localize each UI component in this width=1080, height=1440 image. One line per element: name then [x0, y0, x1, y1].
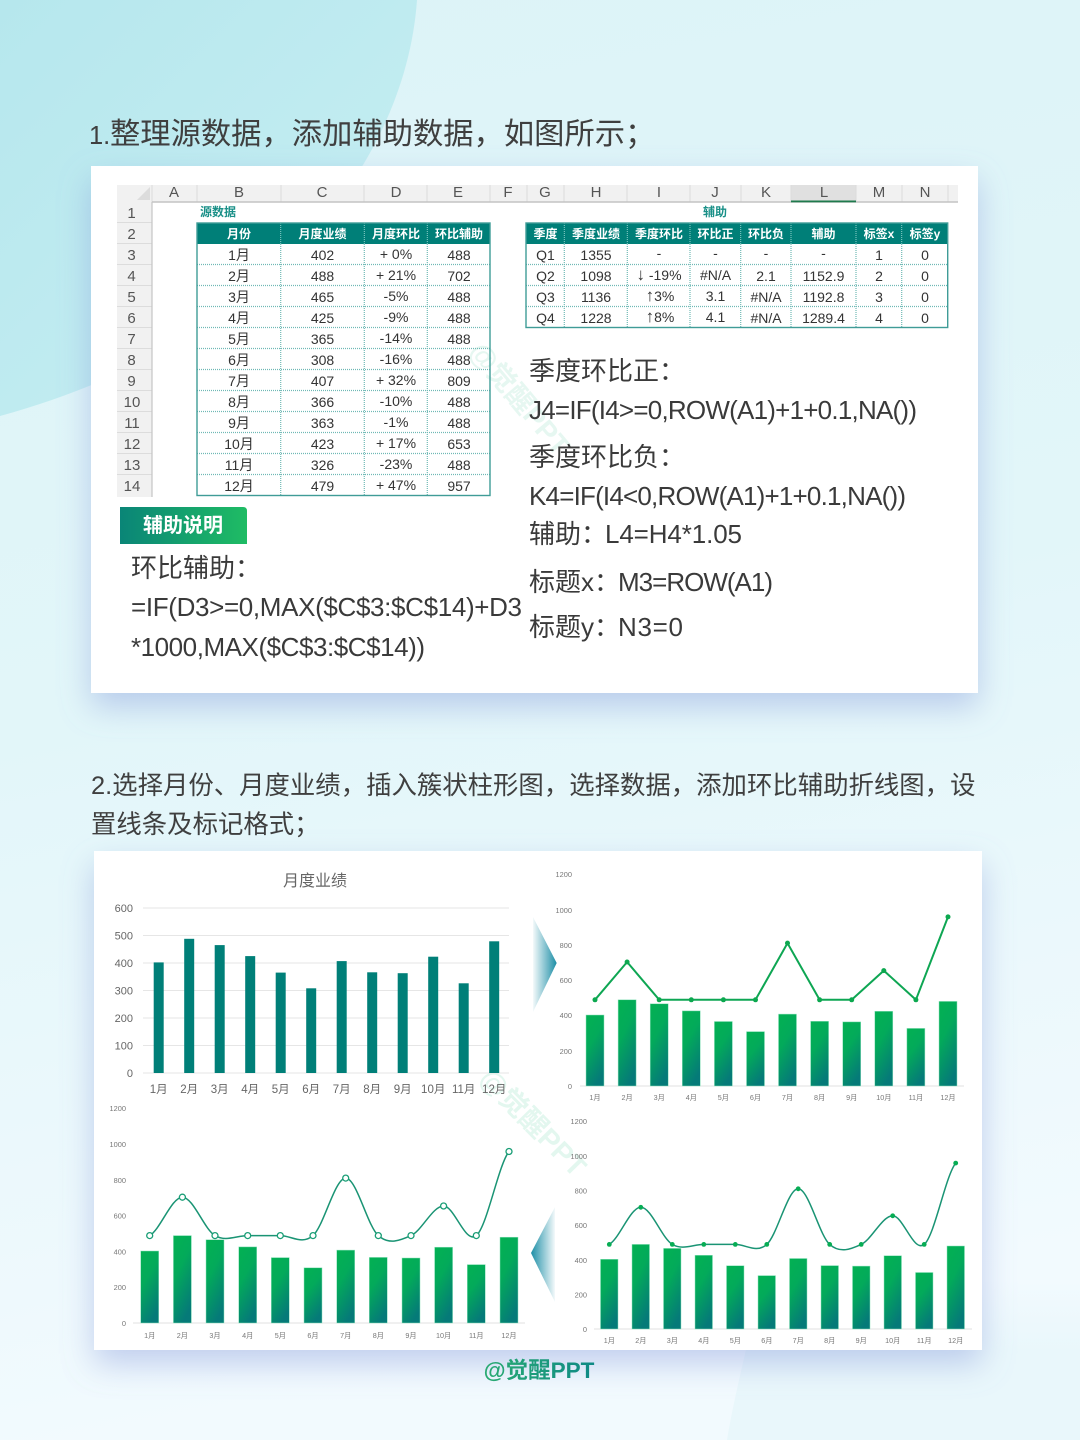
spreadsheet row headers: 10: [124, 394, 140, 411]
x axis labels: 4月: [686, 1093, 697, 1102]
label: helper data: 辅助: [703, 204, 727, 219]
table: quarterly helper data: 4: [875, 310, 883, 326]
y axis labels: 0: [127, 1068, 133, 1080]
heading: step 1: 整理源数据，添加辅助数据，如图所示；: [110, 117, 655, 151]
x axis labels: 8月: [363, 1084, 381, 1096]
x axis labels: 1月: [144, 1331, 155, 1340]
table: monthly data: + 0%: [380, 246, 412, 262]
x axis labels: 2月: [180, 1084, 198, 1096]
spreadsheet column headers: A: [169, 184, 179, 201]
x axis labels: 7月: [793, 1336, 804, 1345]
spreadsheet row headers: 2: [127, 226, 136, 243]
x axis labels: 9月: [394, 1084, 412, 1096]
text: formulas right: 标题x：: [529, 567, 620, 597]
table: monthly data: 702: [447, 268, 471, 284]
spreadsheet column headers: [117, 184, 958, 202]
spreadsheet row headers: 13: [124, 457, 140, 474]
table: quarterly helper data: 1098: [580, 268, 612, 284]
spreadsheet column headers: M: [873, 184, 885, 201]
spreadsheet row headers: 12: [124, 436, 140, 453]
text: formulas right: 季度环比正：: [529, 356, 685, 386]
x axis labels: 5月: [275, 1331, 286, 1340]
spreadsheet row headers: 5: [127, 289, 136, 306]
x axis labels: 7月: [333, 1084, 351, 1096]
x axis labels: 1月: [150, 1084, 168, 1096]
table: monthly data: 4月: [228, 310, 250, 326]
spreadsheet column headers: L: [820, 184, 828, 201]
table: quarterly helper data: 季度环比: [635, 226, 683, 241]
table: quarterly helper data: 0: [921, 310, 929, 326]
y axis labels: 400: [575, 1256, 587, 1265]
table: quarterly helper data: ↑3%: [646, 286, 674, 305]
y axis labels: 400: [560, 1011, 572, 1020]
chart title: 月度业绩: [283, 872, 347, 890]
badge: helper notes: 辅助说明: [143, 513, 223, 537]
table: quarterly helper data: #N/A: [750, 289, 782, 305]
x axis labels: 4月: [698, 1336, 709, 1345]
x axis labels: [604, 1336, 963, 1345]
y axis labels: 0: [568, 1082, 572, 1091]
table: monthly data: 10月: [224, 436, 254, 452]
x axis labels: 6月: [302, 1084, 320, 1096]
text: formulas right: 季度环比负：: [529, 442, 685, 472]
table: monthly data: 12月: [224, 478, 254, 494]
y axis labels: 600: [115, 903, 133, 915]
table: monthly data: 488: [447, 394, 471, 410]
text: formulas right: N3=0: [618, 612, 683, 642]
spreadsheet column headers: D: [391, 184, 402, 201]
table: monthly data: -23%: [380, 456, 412, 472]
bars: [586, 1000, 957, 1086]
x axis labels: 1月: [589, 1093, 601, 1102]
x axis labels: 6月: [761, 1336, 772, 1345]
table: monthly data: -10%: [380, 393, 412, 409]
table: monthly data: 2月: [228, 268, 250, 284]
smooth line with markers: [607, 1161, 958, 1250]
table: monthly data: 809: [447, 373, 471, 389]
chart 2: combo chart with straight line: [556, 870, 964, 1102]
table: monthly data: 363: [311, 415, 334, 431]
y axis labels: 800: [575, 1186, 587, 1196]
heading: step 2: [91, 772, 975, 839]
table: monthly data: 308: [311, 352, 334, 368]
bars: [154, 939, 499, 1073]
table: quarterly helper data: 0: [921, 289, 929, 305]
table: monthly data: -14%: [380, 330, 412, 346]
y axis labels: 1000: [110, 1140, 126, 1149]
x axis labels: 2月: [635, 1336, 646, 1345]
table: quarterly helper data: Q2: [536, 268, 555, 284]
table: monthly data: 653: [447, 436, 471, 452]
table: monthly data: 环比辅助: [435, 226, 483, 241]
table: monthly data: 9月: [228, 415, 250, 431]
x axis labels: 11月: [909, 1093, 923, 1102]
table: quarterly helper data: 1: [875, 247, 883, 263]
x axis labels: 3月: [209, 1331, 221, 1340]
table: quarterly helper data: 2.1: [756, 268, 776, 284]
spreadsheet row headers: 3: [127, 247, 136, 264]
text: helper formula left: *1000,MAX($C$3:$C$14)): [131, 632, 425, 662]
table: quarterly helper data: ↑8%: [646, 307, 674, 326]
y axis labels: 600: [114, 1212, 126, 1220]
table: monthly data: 1月: [228, 247, 250, 263]
table: quarterly helper data: 1355: [580, 247, 612, 263]
table: quarterly helper data: Q3: [536, 289, 555, 305]
y axis labels: 1200: [556, 870, 572, 879]
spreadsheet column headers: C: [317, 184, 328, 201]
spreadsheet row headers: 8: [127, 352, 136, 369]
text: formulas right: 标题y：: [529, 612, 620, 642]
table: monthly data: 488: [311, 268, 334, 284]
table: quarterly helper data: 环比正: [697, 227, 734, 241]
x axis labels: 8月: [824, 1336, 835, 1345]
footer credit: @觉醒PPT: [484, 1358, 595, 1383]
y axis labels: [115, 903, 133, 1080]
spreadsheet row headers: 11: [124, 415, 140, 432]
y axis labels: 200: [114, 1283, 126, 1292]
spreadsheet row headers: 9: [127, 373, 136, 390]
spreadsheet column headers: H: [591, 184, 601, 201]
x axis labels: 3月: [211, 1084, 229, 1096]
y axis labels: 600: [560, 976, 572, 985]
x axis labels: 10月: [421, 1084, 445, 1096]
bars: [600, 1244, 964, 1329]
spreadsheet row headers: 14: [124, 478, 140, 495]
table: quarterly helper data: 2: [875, 268, 883, 284]
chart 4: combo chart with smooth line and solid markers: [571, 1117, 972, 1345]
spreadsheet column headers: B: [234, 184, 244, 201]
table: monthly data: 425: [311, 310, 334, 326]
table: quarterly helper data: 0: [921, 247, 929, 263]
x axis labels: 9月: [856, 1336, 867, 1345]
spreadsheet column headers: F: [503, 184, 513, 201]
chart 3: combo chart with smooth line and hollow markers: [110, 1104, 525, 1340]
table: quarterly helper data: 1152.9: [803, 268, 845, 284]
table: monthly data: 366: [311, 394, 334, 410]
table: monthly data: 5月: [228, 331, 250, 347]
table: monthly data: + 32%: [376, 372, 416, 388]
table: monthly data: [197, 223, 490, 496]
y axis labels: 200: [575, 1290, 587, 1300]
table: monthly data: 488: [447, 415, 471, 431]
table: monthly data: 488: [447, 247, 471, 263]
spreadsheet column headers: K: [761, 184, 771, 201]
table: monthly data: -16%: [380, 351, 412, 367]
table: monthly data: 365: [311, 331, 334, 347]
x axis labels: 10月: [436, 1331, 451, 1340]
y axis labels: 0: [583, 1325, 587, 1334]
table: quarterly helper data: 1228: [580, 310, 612, 326]
x axis labels: 1月: [604, 1336, 615, 1345]
y axis labels: 1200: [110, 1104, 126, 1113]
x axis labels: 9月: [846, 1093, 857, 1102]
y axis labels: [571, 1117, 587, 1334]
y axis labels: 800: [560, 941, 572, 950]
x axis labels: 2月: [622, 1093, 633, 1102]
table: monthly data: 6月: [228, 352, 250, 368]
x axis labels: 10月: [885, 1336, 900, 1345]
x axis labels: 9月: [405, 1331, 417, 1340]
x axis labels: [144, 1331, 517, 1340]
x axis labels: 7月: [340, 1331, 351, 1340]
spreadsheet row headers: 4: [127, 268, 136, 285]
y axis labels: 300: [115, 986, 133, 998]
x axis labels: [589, 1093, 956, 1102]
spreadsheet column headers: E: [453, 184, 463, 201]
x axis labels: 5月: [718, 1093, 729, 1102]
text: formulas right: M3=ROW(A1): [618, 567, 773, 597]
spreadsheet row headers: 6: [127, 310, 136, 327]
table: monthly data: -5%: [384, 288, 408, 304]
table: quarterly helper data: -: [764, 245, 769, 261]
table: monthly data: 423: [311, 436, 334, 452]
x axis labels: 12月: [501, 1331, 517, 1340]
text: formulas right: J4=IF(I4>=0,ROW(A1)+1+0.1,NA()): [529, 395, 917, 425]
arrow: left: [531, 1207, 555, 1302]
label: source data: 源数据: [200, 204, 236, 219]
text: helper formula left: =IF(D3>=0,MAX($C$3:$C$14)+D3: [131, 592, 522, 622]
table: monthly data: 488: [447, 457, 471, 473]
y axis labels: 500: [115, 930, 133, 942]
table: monthly data: 488: [447, 331, 471, 347]
spreadsheet column headers: N: [920, 184, 930, 201]
table: quarterly helper data: Q4: [536, 310, 555, 326]
x axis labels: 12月: [940, 1093, 956, 1102]
table: monthly data: 488: [447, 289, 471, 305]
x axis labels: 3月: [654, 1093, 665, 1102]
line with markers: [592, 914, 950, 1002]
table: monthly data: 488: [447, 352, 471, 368]
x axis labels: 3月: [667, 1336, 678, 1345]
x axis labels: 11月: [469, 1331, 484, 1340]
table: quarterly helper data: 3.1: [706, 288, 725, 304]
table: quarterly helper data: 1289.4: [802, 310, 845, 326]
y axis labels: 1000: [571, 1152, 587, 1161]
table: monthly data: 407: [311, 373, 334, 389]
badge: helper notes: [120, 507, 247, 544]
table: quarterly helper data: 标签x: [864, 226, 895, 241]
watermark: @觉醒PPT: [463, 336, 576, 461]
panel: source data: [91, 166, 978, 693]
table: quarterly helper data: 季度: [533, 226, 558, 241]
table: monthly data: 402: [311, 247, 334, 263]
table: monthly data: 7月: [228, 373, 250, 389]
text: formulas right: K4=IF(I4<0,ROW(A1)+1+0.1,NA()): [529, 481, 906, 511]
text: formulas right: [529, 356, 917, 642]
y axis labels: [556, 870, 572, 1091]
y axis labels: 200: [115, 1013, 133, 1025]
table: monthly data: 月度环比: [372, 226, 420, 241]
table: monthly data: 月度业绩: [298, 226, 347, 241]
x axis labels: 12月: [482, 1084, 506, 1096]
x axis labels: 4月: [242, 1331, 253, 1340]
y axis labels: 0: [122, 1319, 126, 1328]
x axis labels: 7月: [782, 1093, 793, 1102]
spreadsheet row headers: 1: [127, 205, 136, 222]
heading: step 2: 2.选择月份、月度业绩，插入簇状柱形图，选择数据，添加环比辅助折线图，设: [91, 772, 975, 800]
table: monthly data: + 21%: [376, 267, 416, 283]
y axis labels: 1000: [556, 906, 572, 915]
y axis labels: 800: [114, 1176, 126, 1185]
spreadsheet column headers: G: [539, 184, 551, 201]
table: quarterly helper data: 季度业绩: [572, 226, 620, 241]
y axis labels: 400: [115, 958, 133, 970]
y axis labels: 200: [560, 1047, 572, 1056]
table: quarterly helper data: 0: [921, 268, 929, 284]
table: monthly data: 月份: [227, 226, 251, 241]
table: quarterly helper data: #N/A: [750, 310, 782, 326]
table: quarterly helper data: 4.1: [706, 309, 725, 325]
spreadsheet column headers: J: [711, 184, 719, 201]
y axis labels: 100: [115, 1040, 133, 1052]
smooth line with markers: [147, 1148, 512, 1241]
table: quarterly helper data: 辅助: [811, 226, 836, 241]
table: quarterly helper data: -: [657, 245, 662, 261]
x axis labels: 6月: [750, 1093, 761, 1102]
table: quarterly helper data: 环比负: [748, 226, 784, 241]
table: monthly data: 465: [311, 289, 334, 305]
table: monthly data: 11月: [225, 457, 253, 473]
y axis labels: [110, 1104, 126, 1328]
table: monthly data: 3月: [228, 289, 250, 305]
table: quarterly helper data: 1192.8: [803, 289, 845, 305]
bars: [141, 1236, 518, 1323]
x axis labels: 12月: [948, 1336, 963, 1345]
x axis labels: 11月: [917, 1336, 932, 1345]
table: monthly data: 8月: [228, 394, 250, 410]
text: helper formula left: [131, 553, 522, 662]
table: quarterly helper data: -: [821, 245, 826, 261]
table: quarterly helper data: #N/A: [700, 267, 732, 283]
watermark: @觉醒PPT: [474, 1063, 592, 1183]
x axis labels: 8月: [373, 1331, 384, 1340]
table: monthly data: 479: [311, 478, 334, 494]
y axis labels: 1200: [571, 1117, 587, 1126]
heading: step 1: 1.: [89, 122, 110, 150]
table: monthly data: 326: [311, 457, 334, 473]
chart 1: monthly column chart: [115, 872, 509, 1096]
spreadsheet column headers: I: [657, 184, 661, 201]
table: quarterly helper data: [526, 223, 948, 328]
x axis labels: 2月: [177, 1331, 188, 1340]
x axis labels: 11月: [452, 1084, 475, 1096]
x axis labels: 8月: [814, 1093, 825, 1102]
table: monthly data: + 17%: [376, 435, 416, 451]
table: monthly data: -9%: [384, 309, 408, 325]
table: quarterly helper data: ↓ -19%: [636, 265, 682, 284]
x axis labels: 10月: [876, 1093, 891, 1102]
x axis labels: 6月: [307, 1331, 319, 1340]
table: quarterly helper data: 3: [875, 289, 883, 305]
table: monthly data: + 47%: [376, 477, 416, 493]
x axis labels: [150, 1084, 506, 1096]
table: quarterly helper data: Q1: [536, 247, 555, 263]
x axis labels: 4月: [241, 1084, 259, 1096]
panel: chart steps: [94, 851, 982, 1350]
arrow: right: [533, 917, 557, 1012]
text: formulas right: L4=H4*1.05: [605, 519, 742, 549]
x axis labels: 5月: [730, 1336, 741, 1345]
text: helper formula left: 环比辅助：: [131, 553, 261, 583]
spreadsheet row headers: [117, 202, 152, 497]
spreadsheet row headers: 7: [127, 331, 136, 348]
table: monthly data: 488: [447, 310, 471, 326]
table: monthly data: 957: [447, 478, 471, 494]
table: quarterly helper data: -: [713, 245, 718, 261]
table: quarterly helper data: 标签y: [910, 226, 941, 241]
x axis labels: 5月: [272, 1084, 290, 1096]
heading: step 2: 置线条及标记格式；: [91, 811, 320, 839]
y axis labels: 600: [575, 1221, 587, 1230]
text: formulas right: 辅助：: [529, 519, 607, 549]
table: quarterly helper data: 1136: [581, 289, 611, 305]
table: monthly data: -1%: [384, 414, 408, 430]
y axis labels: 400: [114, 1248, 126, 1256]
